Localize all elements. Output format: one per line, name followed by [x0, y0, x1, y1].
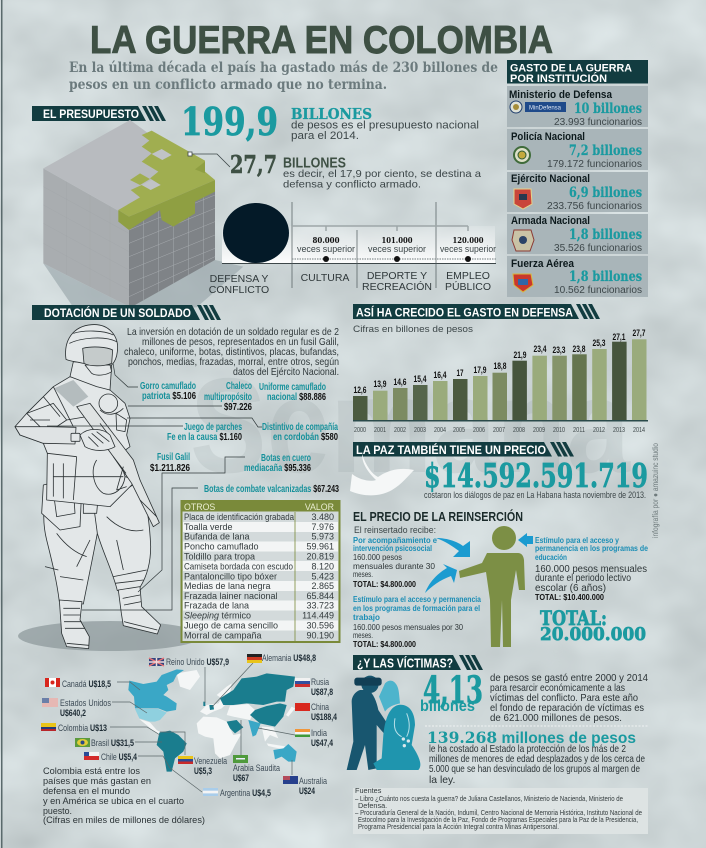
title: LA GUERRA EN COLOMBIA — [90, 19, 553, 62]
panel: fuentes: Estocolmo para la Investigación de la Paz, Fondo de Programas Especiales para la Paz de la Presidencia, — [358, 815, 638, 824]
row: ministerio de defensa — [509, 89, 642, 128]
bar chart: defence spending 2000-2014: 16,4 — [434, 370, 447, 381]
table: otros: VALOR — [305, 502, 334, 512]
text: colombia en el mundo: (Cifras en miles de millones de dólares) — [43, 815, 205, 826]
table: otros: Toalla verde — [184, 522, 233, 532]
text: formacion: TOTAL: $4.800.000 — [353, 639, 416, 649]
flags — [41, 654, 310, 796]
text: colombia en el mundo: defensa en el mundo — [43, 786, 130, 797]
text: educacion: educación — [535, 552, 567, 562]
row: policia nacional — [511, 131, 642, 170]
soldier item labels: Gorro camuflado — [140, 381, 196, 392]
bar chart: defence spending 2000-2014 — [353, 328, 648, 434]
soldier item labels: multipropósito — [204, 392, 252, 403]
leg left — [44, 480, 98, 604]
bar chart: defence spending 2000-2014: 2013 — [613, 425, 625, 434]
row: armada nacional: 35.526 funcionarios — [554, 243, 642, 254]
icon: person — [459, 526, 525, 647]
soldier intro text: chaleco, uniforme, botas, distintivos, placas, bufandas, — [124, 347, 339, 358]
china — [250, 703, 287, 727]
table: otros: Toldillo para tropa — [184, 552, 255, 562]
row: fuerza aerea: 10.562 funcionarios — [554, 285, 642, 296]
table: otros: 90.190 — [306, 630, 334, 640]
soldier item labels: en cordobán $580 — [273, 432, 338, 443]
section header: el presupuesto: EL PRESUPUESTO — [43, 109, 139, 121]
text: proteccion: la ley. — [429, 775, 455, 786]
table: otros: 5.423 — [311, 571, 334, 581]
row: fuerza aerea — [511, 258, 642, 296]
bar chart: defence spending 2000-2014: 2009 — [533, 425, 545, 434]
text: reparacion: el fondo de reparación de víctimas es — [490, 703, 644, 714]
number: 27,7 billones: BILLONES — [283, 156, 346, 172]
comparison chart: defence vs other sectors: EMPLEO — [446, 270, 490, 282]
text: formacion: meses. — [353, 630, 373, 640]
text: acompanamiento — [353, 535, 437, 589]
soldier shadow — [18, 621, 202, 651]
table: otros: 8.120 — [311, 561, 334, 571]
text: educacion: 160.000 pesos mensuales — [535, 564, 647, 575]
soldier intro text: La inversión en dotación de un soldado regular es de 2 — [127, 327, 339, 338]
rifle — [77, 403, 159, 527]
comparison chart: defence vs other sectors: PÚBLICO — [445, 280, 491, 293]
bar chart: defence spending 2000-2014: 13,9 — [374, 379, 386, 390]
figure: 139.268 millones: 139.268 millones de pesos — [427, 728, 636, 747]
map labels: U$87,8 — [311, 687, 333, 697]
table: otros: Poncho camuflado — [184, 542, 259, 552]
table: otros: Placa de identificación grabada — [184, 512, 294, 522]
estados unidos — [135, 709, 167, 722]
row: ministerio de defensa: Ministerio de Defensa — [509, 89, 613, 101]
bar chart: defence spending 2000-2014: 18,8 — [494, 361, 506, 372]
panel: gasto por institucion: POR INSTITUCIÓN — [510, 72, 607, 85]
table: otros: Camiseta bordada con escudo — [184, 561, 293, 571]
table: otros — [181, 501, 340, 642]
soldier intro text: ponchos, medias, frazadas, morral, entre otros, según — [128, 357, 339, 368]
russia — [220, 673, 295, 705]
bar chart: defence spending 2000-2014: 2001 — [374, 425, 386, 434]
comparison chart: defence vs other sectors: CULTURA — [301, 272, 349, 284]
text: acompanamiento: mensuales durante 30 — [353, 561, 435, 571]
section header: gasto en defensa: ASÍ HA CRECIDO EL GASTO EN DEFENSA — [356, 304, 573, 320]
big number: 199,9 billones: BILLONES — [291, 106, 372, 123]
bar chart: defence spending 2000-2014: 21,9 — [514, 350, 526, 361]
text: acompanamiento: intervención psicosocial — [353, 543, 432, 553]
map labels — [58, 653, 338, 798]
comparison chart: defence vs other sectors: CONFLICTO — [209, 284, 269, 296]
number: 27,7 billones — [230, 150, 481, 190]
table: otros: 30.596 — [306, 620, 334, 630]
panel: fuentes: Fuentes — [355, 786, 382, 795]
text: acompanamiento: 160.000 pesos — [353, 552, 402, 562]
text: proteccion: millones de menores de edad desplazados y de los cerca de — [429, 754, 645, 765]
arabia — [227, 720, 243, 733]
table: otros: 59.961 — [306, 542, 334, 552]
row: policia nacional: Policía Nacional — [511, 131, 585, 143]
icon: black circle for defence — [223, 203, 289, 263]
text: reparacion: para resarcir económicamente a las — [490, 683, 625, 694]
table: otros: 7.976 — [311, 522, 334, 532]
big number: 199,9 billones: para el 2014. — [291, 130, 359, 142]
text: educacion: Estímulo para el acceso y — [535, 535, 619, 545]
map labels: U$640,2 — [60, 708, 86, 718]
map labels: Chile U$5,4 — [101, 752, 138, 762]
text: reparacion — [490, 673, 648, 724]
map leader lines — [110, 663, 295, 792]
bar chart: defence spending 2000-2014: 23,4 — [534, 344, 547, 355]
text: formacion: Estímulo para el acceso y permanencia — [353, 594, 481, 604]
number: 27,7 billones: 27,7 — [230, 150, 277, 179]
map labels: Arabia Saudita — [233, 763, 281, 773]
bar chart: defence spending 2000-2014: 25,3 — [592, 338, 606, 349]
soldier item labels: nacional $88.886 — [267, 392, 326, 403]
bar chart: defence spending 2000-2014: 12,6 — [354, 385, 366, 396]
bar chart: defence spending 2000-2014: 2012 — [593, 425, 605, 434]
bar chart: defence spending 2000-2014: 2003 — [414, 425, 426, 434]
bar chart: defence spending 2000-2014: 27,1 — [612, 332, 626, 343]
soldier leader lines — [47, 363, 262, 610]
canada — [128, 669, 184, 712]
bar chart: defence spending 2000-2014: 2002 — [394, 425, 406, 434]
bar chart: defence spending 2000-2014: 2000 — [354, 425, 366, 434]
map labels: U$188,4 — [311, 712, 338, 722]
torso — [15, 377, 137, 507]
table: otros: Frazada lainer nacional — [184, 591, 278, 601]
comparison chart: defence vs other sectors — [209, 202, 496, 296]
text: proteccion: le ha costado al Estado la protección de los más de 2 — [429, 744, 626, 755]
watch — [71, 433, 80, 441]
soldier item labels: Fe en la causa $1.160 — [167, 432, 242, 443]
comparison chart: defence vs other sectors: 120.000 — [452, 236, 484, 246]
panel: fuentes: Programa Presidencial para la Acción Integral contra Minas Antipersonal. — [358, 822, 559, 831]
bar chart: defence spending 2000-2014: 2007 — [493, 425, 505, 434]
text: formacion: en los programas de formación para el — [353, 603, 480, 613]
table: otros: Sleeping térmico — [184, 611, 251, 621]
soldier item labels: Juego de parches — [184, 422, 242, 433]
text: educacion: permanencia en los programas de — [535, 543, 648, 553]
connector: cube to 27,7 — [188, 152, 230, 167]
soldier illustration — [15, 325, 161, 649]
table: otros: 5.973 — [311, 532, 334, 542]
map labels: India — [311, 728, 328, 738]
text: reparacion: víctimas del conflicto. Para este año — [490, 693, 638, 704]
heading: reinsercion — [353, 509, 523, 536]
bar chart: defence spending 2000-2014: 2004 — [434, 425, 446, 434]
icon: dove — [350, 454, 414, 495]
number: 27,7 billones: defensa y conflicto armado. — [283, 180, 421, 190]
bar chart: defence spending 2000-2014: 17,9 — [474, 365, 486, 376]
boots — [59, 600, 89, 649]
bar chart: defence spending 2000-2014: 2006 — [473, 425, 485, 434]
text: proteccion — [429, 744, 645, 786]
text: proteccion: 5.000 que se han desvinculado de los grupos al margen de — [429, 764, 640, 775]
panel: fuentes: Defensa. — [358, 801, 387, 810]
text: educacion: TOTAL: $10.400.000 — [535, 592, 604, 602]
table: otros: Medias de lana negra — [184, 581, 271, 591]
soldier intro text — [124, 327, 339, 378]
bar chart: defence spending 2000-2014: 23,8 — [572, 344, 586, 355]
soldier intro text: datos del Ejército Nacional. — [233, 367, 339, 378]
india — [248, 720, 261, 737]
soldier item labels: mediacaña $95.336 — [244, 463, 311, 474]
comparison chart: defence vs other sectors: veces superior — [440, 244, 496, 254]
row: ministerio de defensa: MinDefensa — [529, 106, 562, 112]
bar chart: defence spending 2000-2014: 23,3 — [552, 345, 566, 356]
chest pad — [99, 394, 118, 413]
row: ejercito nacional: 6,9 billones — [569, 185, 642, 201]
comparison chart: defence vs other sectors: 80.000 — [312, 236, 340, 246]
table: otros: Frazada de lana — [184, 601, 249, 611]
figure: 4,13 billones: billones — [420, 698, 475, 715]
standing figure — [347, 690, 392, 770]
total: 20.000.000 — [540, 624, 646, 645]
text: colombia en el mundo — [43, 766, 205, 826]
text: educacion — [535, 535, 648, 602]
figure: 4,13 billones — [420, 668, 483, 715]
text: educacion: escolar (6 años) — [535, 583, 606, 594]
map labels: Rusia — [311, 677, 330, 687]
upper body — [15, 377, 137, 507]
australia — [273, 744, 297, 762]
text: acompanamiento: TOTAL: $4.800.000 — [353, 579, 416, 589]
comparison chart: defence vs other sectors: DEFENSA Y — [210, 273, 268, 285]
row: armada nacional: 1,8 billones — [569, 227, 642, 243]
bar chart: defence spending 2000-2014: 14,6 — [394, 377, 406, 388]
total — [540, 606, 646, 645]
shading — [54, 380, 88, 444]
row: ejercito nacional — [511, 173, 642, 212]
section header: el presupuesto — [32, 106, 166, 121]
bar chart: defence spending 2000-2014: 2011 — [573, 425, 585, 434]
text: formacion — [353, 594, 481, 649]
subtitle: En la última década el país ha gastado más de 230 billones de — [69, 60, 498, 76]
row: ejercito nacional: Ejército Nacional — [511, 173, 590, 185]
helmet — [66, 325, 118, 365]
row: fuerza aerea: 1,8 billones — [569, 269, 642, 285]
cube green share — [118, 131, 215, 217]
table: otros: Pantaloncillo tipo bóxer — [184, 571, 277, 581]
soldier item labels: patriota $5.106 — [142, 391, 196, 402]
big number: 199,9 billones — [181, 99, 479, 144]
forearm — [15, 427, 76, 444]
bar chart: defence spending 2000-2014: 17 — [456, 368, 464, 379]
comparison chart: defence vs other sectors: DEPORTE Y — [367, 270, 427, 282]
map labels: Colombia U$13 — [58, 723, 107, 733]
text: formacion: trabajo — [353, 612, 380, 622]
vest details — [27, 387, 125, 500]
panel: fuentes: – Libro ¿Cuánto nos cuesta la guerra? de Juliana Castellanos, Ministerio de Nacienda, Ministerio de — [355, 794, 623, 803]
soldier item labels: $97.226 — [224, 402, 252, 413]
panel: fuentes: – Procuraduría General de la Nación, Indumil, Centro Nacional de Memoria Histórica, Instituto Nacional de — [355, 808, 642, 817]
neck and face — [70, 362, 112, 390]
table: otros: 33.723 — [306, 601, 334, 611]
chart note: Cifras en billones de pesos — [353, 324, 473, 335]
row: ministerio de defensa: 10 billones — [574, 101, 642, 117]
soldier item labels: Chaleco — [226, 381, 252, 392]
row: ministerio de defensa: 23.993 funcionarios — [554, 117, 642, 128]
soldier item labels: Distintivo de compañía — [262, 422, 338, 433]
vertical credit: infografía por ● amazuinc studio — [651, 443, 660, 538]
section header: la paz: LA PAZ TAMBIÉN TIENE UN PRECIO — [356, 442, 546, 457]
bar chart: defence spending 2000-2014: 15,4 — [414, 374, 427, 385]
row: policia nacional: 179.172 funcionarios — [547, 159, 642, 170]
table: otros: 20.819 — [306, 552, 334, 562]
table: otros: 65.844 — [306, 591, 334, 601]
map labels: Reino Unido U$57,9 — [166, 657, 229, 667]
europe highlights — [209, 705, 214, 710]
text: colombia en el mundo: Colombia está entre los — [43, 766, 140, 777]
row: fuerza aerea: Fuerza Aérea — [511, 258, 575, 270]
subtitle — [69, 60, 498, 93]
table: otros: Bufanda de lana — [184, 532, 250, 542]
subtitle: pesos en un conflicto armado que no termina. — [69, 77, 387, 93]
panel: gasto por institucion — [507, 60, 648, 297]
kneeling figure — [373, 705, 420, 770]
pouches — [42, 478, 82, 530]
comparison chart: defence vs other sectors: veces superior — [368, 244, 426, 254]
comparison chart: defence vs other sectors: RECREACIÓN — [362, 280, 432, 293]
map labels: U$67 — [233, 773, 249, 783]
map labels: Venezuela — [194, 756, 228, 766]
soldier item labels: Fusil Galil — [157, 452, 190, 463]
bar chart: defence spending 2000-2014: 2010 — [553, 425, 565, 434]
bar chart: defence spending 2000-2014: 2005 — [453, 425, 465, 434]
big number: 199,9 billones: de pesos es el presupuesto nacional — [291, 120, 479, 132]
text: colombia en el mundo: y en América se ubica en el cuarto — [43, 796, 184, 807]
table: otros: Morral de campaña — [184, 630, 262, 640]
arrows — [425, 533, 533, 593]
text: formacion: 160.000 pesos mensuales por 30 — [353, 622, 463, 632]
bar chart: defence spending 2000-2014: 2014 — [633, 425, 645, 434]
soldier item labels — [140, 381, 339, 495]
panel: gasto por institucion: GASTO DE LA GUERRA — [510, 62, 632, 74]
map labels: China — [311, 702, 330, 712]
leg right — [93, 480, 151, 591]
back figure — [379, 681, 400, 712]
hand — [80, 429, 115, 450]
text: colombia en el mundo: puesto. — [43, 806, 72, 817]
comparison chart: defence vs other sectors: veces superior — [297, 244, 355, 254]
panel: fuentes — [353, 786, 648, 834]
text: Semana — [190, 350, 631, 501]
south america — [157, 731, 187, 772]
comparison chart: defence vs other sectors: 101.000 — [382, 236, 413, 246]
bar chart: defence spending 2000-2014: 2008 — [513, 425, 525, 434]
section header: victimas: ¿Y LAS VÍCTIMAS? — [357, 656, 453, 670]
soldier item labels: Botas en cuero — [261, 453, 311, 464]
icon: victims figures — [347, 676, 420, 770]
text: acompanamiento: meses. — [353, 569, 373, 579]
map labels: U$24 — [299, 786, 316, 796]
total: TOTAL: — [540, 606, 607, 630]
soldier item labels: Botas de combate valcanizadas $67.243 — [204, 484, 339, 495]
map: world military spending — [41, 653, 338, 798]
section header: dotacion: DOTACIÓN DE UN SOLDADO — [44, 305, 191, 320]
number: 27,7 billones: es decir, el 17,9 por ciento, se destina a — [283, 169, 481, 180]
map labels: Estados Unidos — [60, 698, 111, 708]
heading: reinsercion: El reinsertado recibe: — [354, 525, 436, 536]
text: educacion: durante el periodo lectivo — [535, 573, 631, 584]
big number: 199,9 billones: 199,9 — [181, 99, 278, 144]
soldier intro text: millones de pesos, representados en un fusil Galil, — [142, 337, 339, 348]
row: armada nacional: Armada Nacional — [511, 215, 590, 227]
row: ejercito nacional: 233.756 funcionarios — [547, 201, 642, 212]
soldier item labels: Uniforme camuflado — [259, 382, 326, 393]
text: colombia en el mundo: países que más gastan en — [43, 776, 151, 787]
table: otros: Juego de cama sencillo — [184, 620, 278, 630]
row: policia nacional: 7,2 billones — [569, 143, 642, 159]
text: reparacion: de 621.000 millones de pesos. — [490, 713, 622, 724]
table: otros: OTROS — [184, 502, 215, 512]
soldier item labels: $1.211.826 — [150, 463, 190, 474]
map labels: U$47,4 — [311, 738, 334, 748]
map labels: Canadá U$18,5 — [62, 679, 111, 689]
table: otros: 2.865 — [311, 581, 334, 591]
table: otros: 114.449 — [302, 611, 334, 621]
text: acompanamiento: Por acompañamiento e — [353, 535, 437, 545]
figure: 4,13 billones: 4,13 — [423, 668, 483, 712]
table: otros: 3.480 — [311, 512, 334, 522]
text: reparacion: de pesos se gastó entre 2000 y 2014 — [490, 673, 648, 684]
map labels: Brasil U$31,5 — [91, 738, 134, 748]
row: armada nacional — [511, 215, 642, 254]
map labels: Alemania U$48,8 — [262, 653, 316, 663]
cube chart — [43, 120, 243, 308]
map land masses — [139, 670, 295, 758]
heading: reinsercion: EL PRECIO DE LA REINSERCIÓN — [353, 509, 523, 524]
bar chart: defence spending 2000-2014: 27,7 — [632, 328, 646, 339]
map labels: U$5,3 — [194, 766, 212, 776]
map labels: Argentina U$4,5 — [220, 788, 271, 798]
map labels: Australia — [299, 776, 328, 786]
